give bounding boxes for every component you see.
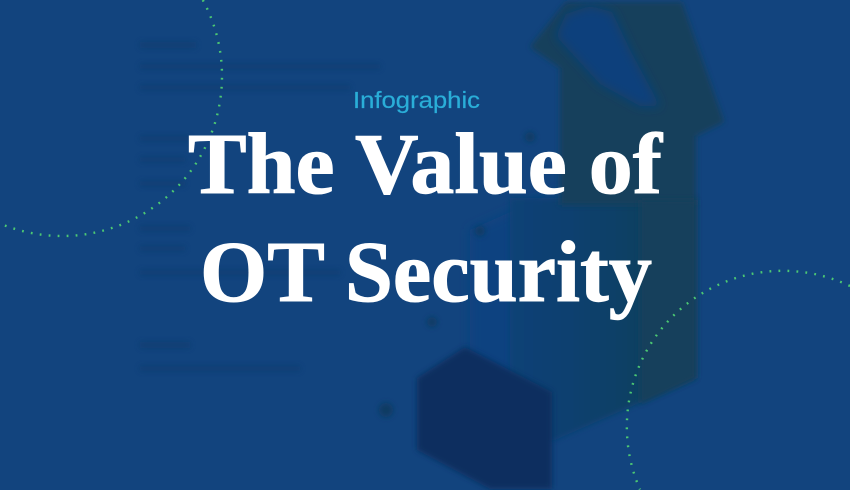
decorative dotted arc: top left (0, 0, 222, 236)
blurred house: green lower wall edge (640, 200, 696, 404)
blurred house: wall with blue-to-green gradient (510, 198, 696, 440)
blurred house: green roof and upper wall (530, 2, 724, 205)
blurred text lines (145, 44, 191, 346)
eyebrow label: Infographic (353, 87, 480, 113)
blurred dark cube (417, 347, 552, 489)
blurred cloud emblem (556, 6, 660, 106)
blurred column: blue left face (470, 214, 506, 345)
blurred background illustration (140, 2, 724, 489)
decorative dotted arc: bottom right (627, 271, 850, 490)
blurred dots (379, 132, 535, 417)
title line 2: OT Security (200, 223, 652, 320)
title (188, 115, 663, 320)
title line 1: The Value of (188, 115, 663, 212)
